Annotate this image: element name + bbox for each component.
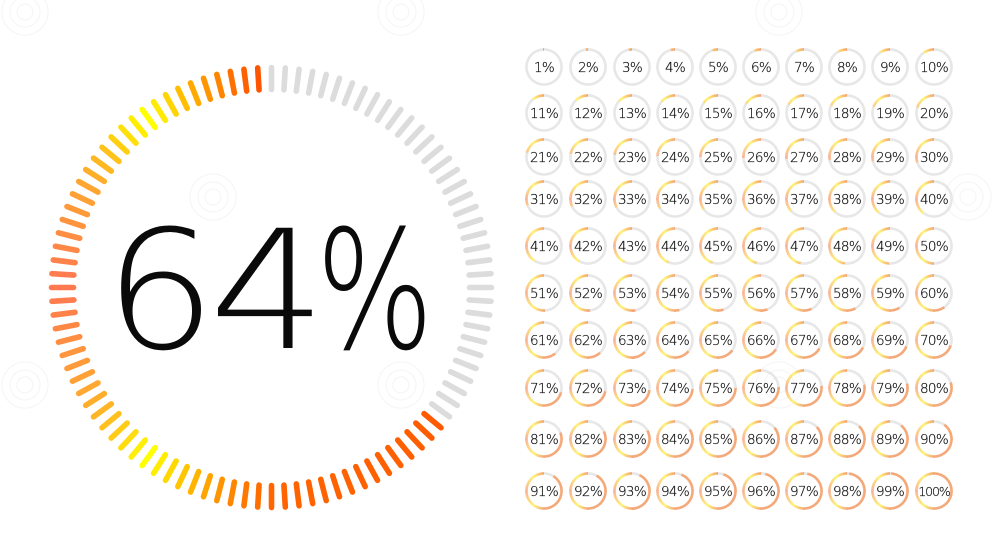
row 8: 80% [920,381,948,397]
row 6: 51% [530,286,558,302]
row 6: 52% [574,286,602,302]
row 1: 4% [665,60,685,76]
row 6: 55% [704,286,732,302]
row 5: 44% [661,239,689,255]
row 8: 73% [618,381,646,397]
row 6: 58% [833,286,861,302]
row 10: 100% [918,484,950,498]
gauge ticks: 64 coloured segments [52,68,441,508]
row 3: 28% [833,150,861,166]
row 4: 33% [618,192,646,208]
row 10: 95% [704,484,732,500]
row 7: 66% [747,333,775,349]
row 1: 3% [622,60,642,76]
row 5: 50% [920,239,948,255]
big readout: 64%: 4 [209,195,327,388]
gauge ticks: 36 grey segments [272,68,492,417]
row 9: 83% [618,432,646,448]
row 2: 14% [661,106,689,122]
big readout: 64%: 6 [104,195,216,388]
row 1: 9% [880,60,900,76]
row 8 [525,369,953,407]
row 6 [525,274,953,312]
large radial gauge with 64% readout [48,64,494,510]
row 2: 11% [530,106,558,122]
row 7: 64% [661,333,689,349]
row 3: 26% [747,150,775,166]
row 9: 88% [833,432,861,448]
row 4: 34% [661,192,689,208]
row 4: 38% [833,192,861,208]
row 3: 29% [876,150,904,166]
row 7: 68% [833,333,861,349]
row 6: 53% [618,286,646,302]
row 9: 81% [530,432,558,448]
row 3: 30% [920,150,948,166]
row 8: 79% [876,381,904,397]
row 4: 32% [574,192,602,208]
row 6: 57% [790,286,818,302]
big readout: 64% [104,195,434,388]
row 2 [525,94,953,132]
row 8: 74% [661,381,689,397]
row 8: 72% [574,381,602,397]
row 4 [525,180,953,218]
row 9: 86% [747,432,775,448]
row 1: 6% [751,60,771,76]
row 3: 27% [790,150,818,166]
row 9 [525,420,953,458]
row 9: 89% [876,432,904,448]
row 6: 60% [920,286,948,302]
row 7: 62% [574,333,602,349]
row 10: 99% [876,484,904,500]
row 10: 94% [661,484,689,500]
row 2: 15% [704,106,732,122]
row 4: 39% [876,192,904,208]
row 4: 36% [747,192,775,208]
row 8: 75% [704,381,732,397]
row 1: 8% [837,60,857,76]
row 8: 76% [747,381,775,397]
row 2: 19% [876,106,904,122]
row 3: 24% [661,150,689,166]
row 7: 67% [790,333,818,349]
row 10: 92% [574,484,602,500]
row 8: 78% [833,381,861,397]
row 1: 7% [794,60,814,76]
row 7: 63% [618,333,646,349]
row 4: 35% [704,192,732,208]
row 1: 2% [578,60,598,76]
row 3: 25% [704,150,732,166]
row 8: 77% [790,381,818,397]
row 9: 87% [790,432,818,448]
row 7: 61% [530,333,558,349]
row 5: 45% [704,239,732,255]
row 3: 22% [574,150,602,166]
row 9: 85% [704,432,732,448]
row 6: 56% [747,286,775,302]
row 4: 40% [920,192,948,208]
row 10: 98% [833,484,861,500]
row 1: 1% [534,60,554,76]
row 2: 18% [833,106,861,122]
row 6: 59% [876,286,904,302]
row 4: 37% [790,192,818,208]
row 7 [525,321,953,359]
row 8: 71% [530,381,558,397]
row 2: 17% [790,106,818,122]
row 1: 10% [920,60,948,76]
row 7: 69% [876,333,904,349]
row 6: 54% [661,286,689,302]
row 5: 47% [790,239,818,255]
row 5: 46% [747,239,775,255]
small gauges grid, 1% to 100% [525,48,953,510]
row 10: 91% [530,484,558,500]
row 7: 70% [920,333,948,349]
row 9: 90% [920,432,948,448]
row 2: 16% [747,106,775,122]
row 2: 20% [920,106,948,122]
row 1: 5% [708,60,728,76]
big readout: 64%: % [316,196,434,388]
row 5: 43% [618,239,646,255]
row 4: 31% [530,192,558,208]
row 1 [525,48,953,86]
row 5 [525,227,953,265]
row 5: 42% [574,239,602,255]
row 5: 41% [530,239,558,255]
row 3 [525,138,953,176]
row 3: 21% [530,150,558,166]
row 10: 93% [618,484,646,500]
row 9: 84% [661,432,689,448]
row 5: 49% [876,239,904,255]
row 10 [525,472,953,510]
row 9: 82% [574,432,602,448]
row 5: 48% [833,239,861,255]
row 10: 97% [790,484,818,500]
row 2: 13% [618,106,646,122]
row 3: 23% [618,150,646,166]
row 7: 65% [704,333,732,349]
row 2: 12% [574,106,602,122]
row 10: 96% [747,484,775,500]
